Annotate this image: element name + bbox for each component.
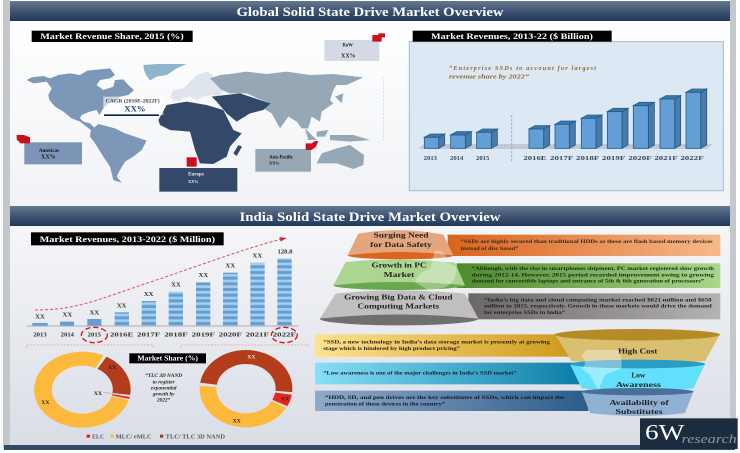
- translucent arrow: [415, 250, 457, 294]
- driver bar: big data: for enterprise SSDs in India”: [484, 311, 566, 316]
- restraint bar: substitutes: penetration of these devices in the country”: [325, 403, 446, 408]
- donut labels: XX: [41, 400, 50, 406]
- bar value labels: XX: [253, 253, 262, 260]
- callout: Americas: [17, 135, 82, 164]
- year labels: 2017F: [137, 332, 160, 339]
- callout: RoW: RoW: [342, 44, 353, 49]
- translucent arrow: [582, 350, 622, 390]
- funnel: low awareness: Awareness: [616, 380, 661, 389]
- logo: 6W research: 6W: [645, 420, 685, 445]
- highlight circles: [81, 327, 297, 343]
- legend: TLC/ TLC 3D NAND: [166, 434, 226, 440]
- donut labels: XX: [108, 365, 117, 371]
- chart title: Market Revenues, 2013-2022 ($ Million): [40, 234, 215, 244]
- driver bar: data safety: instead of disc based”: [461, 247, 519, 252]
- legend: ELC: [92, 434, 104, 440]
- driver bar: PC market: “Although, with the rise in smartphones shipment, PC market registered slow growth: [472, 266, 714, 272]
- callout: Asia-Pacific: Asia-Pacific: [269, 156, 293, 161]
- driver bar: PC market: [457, 263, 720, 288]
- funnel: high cost: High Cost: [618, 346, 658, 355]
- year labels: 2022F: [273, 332, 296, 339]
- bar value labels: XX: [35, 313, 45, 320]
- funnel: high cost: [555, 329, 720, 364]
- year labels: 2014: [61, 332, 75, 339]
- callout: Europe: [159, 157, 237, 192]
- pyramid: PC market: [333, 260, 465, 290]
- year labels: 2018F: [576, 155, 599, 162]
- header: global overview: Global Solid State Drive Market Overview: [236, 4, 504, 19]
- header: India overview: [10, 206, 730, 226]
- callout: CAGR: CAGR (2016E-2022F): [106, 99, 160, 104]
- callout: Americas: Americas: [39, 149, 59, 154]
- panel: world map: [17, 31, 385, 192]
- panel: India market revenues: [27, 232, 298, 343]
- quote: 2022”: [156, 397, 171, 403]
- map: north america: [27, 68, 134, 131]
- year labels: 2017F: [550, 155, 573, 162]
- donut labels: XX: [281, 396, 290, 402]
- year labels: 2021F: [654, 155, 678, 162]
- donut labels: XX: [247, 355, 256, 361]
- year labels: 2021F: [246, 332, 269, 339]
- bars: [32, 258, 292, 326]
- chart title: Market Revenues, 2013-22 ($ Billion): [431, 32, 593, 41]
- bar floor: [418, 144, 713, 149]
- pyramid: data safety: Surging Need: [373, 231, 429, 240]
- map: asia: [210, 72, 363, 128]
- panel: market share: [27, 345, 308, 440]
- restraint bar: substitutes: [315, 391, 588, 411]
- year labels: 2019F: [192, 332, 215, 339]
- year labels: 2022F: [680, 155, 704, 162]
- pyramid: big data: [320, 290, 478, 325]
- funnel: availability of substitutes: Availability of: [609, 398, 669, 407]
- funnel: availability of substitutes: Substitutes: [615, 407, 663, 416]
- callout: RoW: XX%: [341, 54, 356, 60]
- restraint bar: substitutes: “HDD, SD, and pen drives are the key substitutes of SSDs, which can impact the: [325, 395, 565, 401]
- restraint bar: low awareness: [315, 363, 580, 384]
- chart background: [409, 42, 723, 191]
- header: India overview: India Solid State Drive Market Overview: [240, 209, 501, 224]
- callout: Asia-Pacific: [255, 141, 318, 172]
- funnel: low awareness: Low: [631, 371, 646, 380]
- callout: Europe: Europe: [188, 173, 205, 178]
- year labels: [33, 332, 296, 339]
- panel: restraints: [315, 329, 738, 449]
- year labels: 2014: [450, 155, 464, 162]
- donut: 2015: [29, 347, 136, 432]
- quote: to register: [153, 379, 176, 385]
- map title: [32, 31, 193, 42]
- driver bar: big data: “India’s big data and cloud computing market reached $821 million and $650: [484, 297, 712, 303]
- year labels: 2016E: [110, 332, 134, 339]
- donut: 2022: [194, 345, 298, 432]
- year labels: 2013: [33, 332, 47, 339]
- callout: Europe: XX%: [188, 179, 199, 184]
- year labels: [424, 155, 704, 162]
- quote: “Enterprise SSDs to account for largest: [449, 65, 596, 72]
- pyramid: PC market: Market: [384, 270, 415, 279]
- restraint bar: high cost: stage which is hindered by high product pricing”: [323, 347, 461, 352]
- year labels: 2018F: [164, 332, 188, 339]
- quote: “TLC 3D NAND: [145, 373, 182, 379]
- market share title: [129, 353, 206, 363]
- panel: global market revenues: [409, 31, 723, 191]
- donut labels: XX: [94, 391, 103, 397]
- brackets: [27, 345, 308, 348]
- callout: CAGR: [103, 97, 163, 116]
- map: europe: [170, 72, 223, 101]
- quote: [449, 65, 596, 80]
- year labels: 2020F: [219, 332, 242, 339]
- donut labels: [41, 355, 290, 424]
- logo: 6W research: research: [682, 432, 737, 446]
- chart title: [413, 31, 612, 42]
- restraint bar: high cost: “SSD, a new technology in India’s data storage market is presently at growing: [323, 340, 551, 346]
- map: madagascar: [233, 145, 242, 156]
- map: australia: [317, 145, 364, 169]
- quote: [145, 373, 182, 403]
- donut labels: XX: [233, 418, 242, 424]
- funnel: low awareness: [570, 360, 705, 391]
- year labels: 2016E: [523, 155, 547, 162]
- bar value labels: XX: [199, 272, 208, 279]
- pyramid: PC market: Growth in PC: [371, 261, 426, 270]
- bar value labels: XX: [117, 302, 127, 309]
- map: greenland: [143, 64, 187, 80]
- bar value labels: 128.8: [278, 248, 293, 255]
- callout: Asia-Pacific: XX%: [269, 161, 280, 166]
- driver bar: data safety: [448, 235, 720, 256]
- year labels: 2015: [88, 332, 102, 339]
- callout: Americas: XX%: [41, 155, 56, 161]
- legend: MLC/ eMLC: [116, 434, 152, 440]
- legend: [87, 434, 226, 440]
- callout: CAGR: XX%: [124, 104, 146, 114]
- year labels: 2013: [424, 155, 438, 162]
- year labels: 2015: [476, 155, 490, 162]
- quote: exponential: [151, 385, 177, 391]
- driver bar: big data: million in 2015, respectively. Growth in these markets would drive the demand: [484, 305, 712, 310]
- driver bar: PC market: demand for convertible laptops and entrance of 5th & 6th generation of processors”: [472, 280, 705, 285]
- map: middle east: [212, 93, 271, 122]
- panel: drivers: [320, 230, 720, 325]
- driver bar: big data: [468, 293, 720, 319]
- logo: 6W research: [640, 418, 738, 449]
- chart title: [31, 232, 224, 245]
- pyramid: big data: Growing Big Data & Cloud: [344, 292, 453, 301]
- bar value labels: [35, 248, 293, 320]
- quote: growth by: [152, 391, 175, 397]
- year labels: 2019F: [602, 155, 625, 162]
- bar value labels: XX: [63, 312, 72, 319]
- market share title: Market Share (%): [137, 355, 199, 363]
- funnel: availability of substitutes: [582, 388, 694, 416]
- bar value labels: XX: [171, 282, 181, 289]
- trend arrow: [35, 237, 287, 310]
- restraint bar: high cost: [315, 334, 570, 357]
- year labels: 2020F: [628, 155, 652, 162]
- pyramid: data safety: [348, 230, 454, 259]
- bar value labels: XX: [144, 291, 154, 298]
- map: africa: [158, 102, 242, 164]
- callout: RoW: [324, 33, 385, 61]
- quote: revenue share by 2022”: [449, 73, 530, 80]
- map: south america: [90, 124, 147, 183]
- driver bar: PC market: during 2012-14. However, 2015 period recorded improvement owing to growing: [472, 273, 715, 278]
- pyramid: data safety: for Data Safety: [370, 240, 432, 249]
- 3D bars: [424, 89, 707, 148]
- driver bar: data safety: “SSDs are highly secured than traditional HDDs as these are flash based memory devices: [461, 239, 713, 245]
- pyramid: big data: Computing Markets: [357, 302, 439, 311]
- header: global overview: [10, 1, 730, 21]
- map: southeast asia islands: [305, 93, 370, 142]
- bar value labels: XX: [226, 263, 235, 270]
- restraint bar: low awareness: “Low awareness is one of the major challenges in India’s SSD market”: [323, 371, 517, 377]
- map title: Market Revenue Share, 2015 (%): [40, 32, 184, 41]
- bar value labels: XX: [90, 309, 99, 316]
